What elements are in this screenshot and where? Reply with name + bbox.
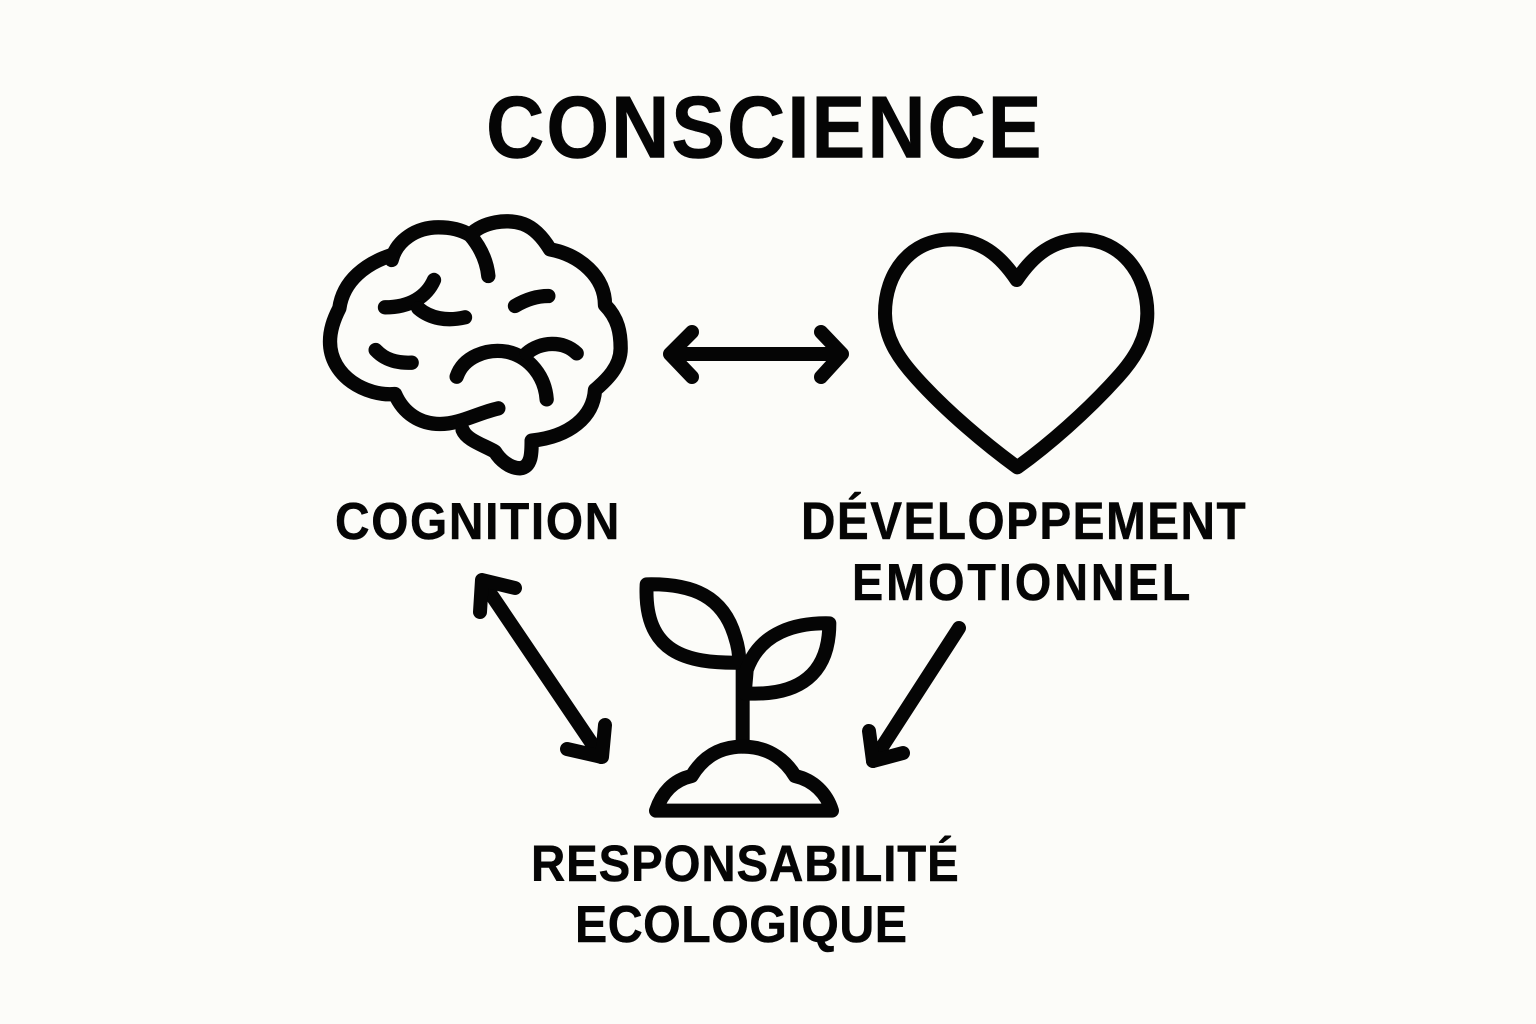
icon: brain [330, 221, 621, 468]
icon: heart [885, 239, 1147, 467]
label: emotional development: EMOTIONNEL [852, 554, 1190, 612]
label: emotional development: DÉVELOPPEMENT [801, 491, 1246, 551]
label: ecological responsibility: ECOLOGIQUE [575, 895, 907, 953]
arrow: cognition to ecological responsibility [480, 580, 605, 757]
label: ecological responsibility: RESPONSABILITÉ [531, 834, 959, 892]
label: ecological responsibility [531, 834, 959, 953]
icon: sprout [646, 584, 832, 811]
title: CONSCIENCE [486, 77, 1042, 176]
label: cognition: COGNITION [335, 492, 619, 550]
arrow: cognition to emotional development [670, 332, 842, 377]
label: emotional development [801, 491, 1246, 612]
arrow: emotional development to ecological responsibility [869, 628, 959, 761]
